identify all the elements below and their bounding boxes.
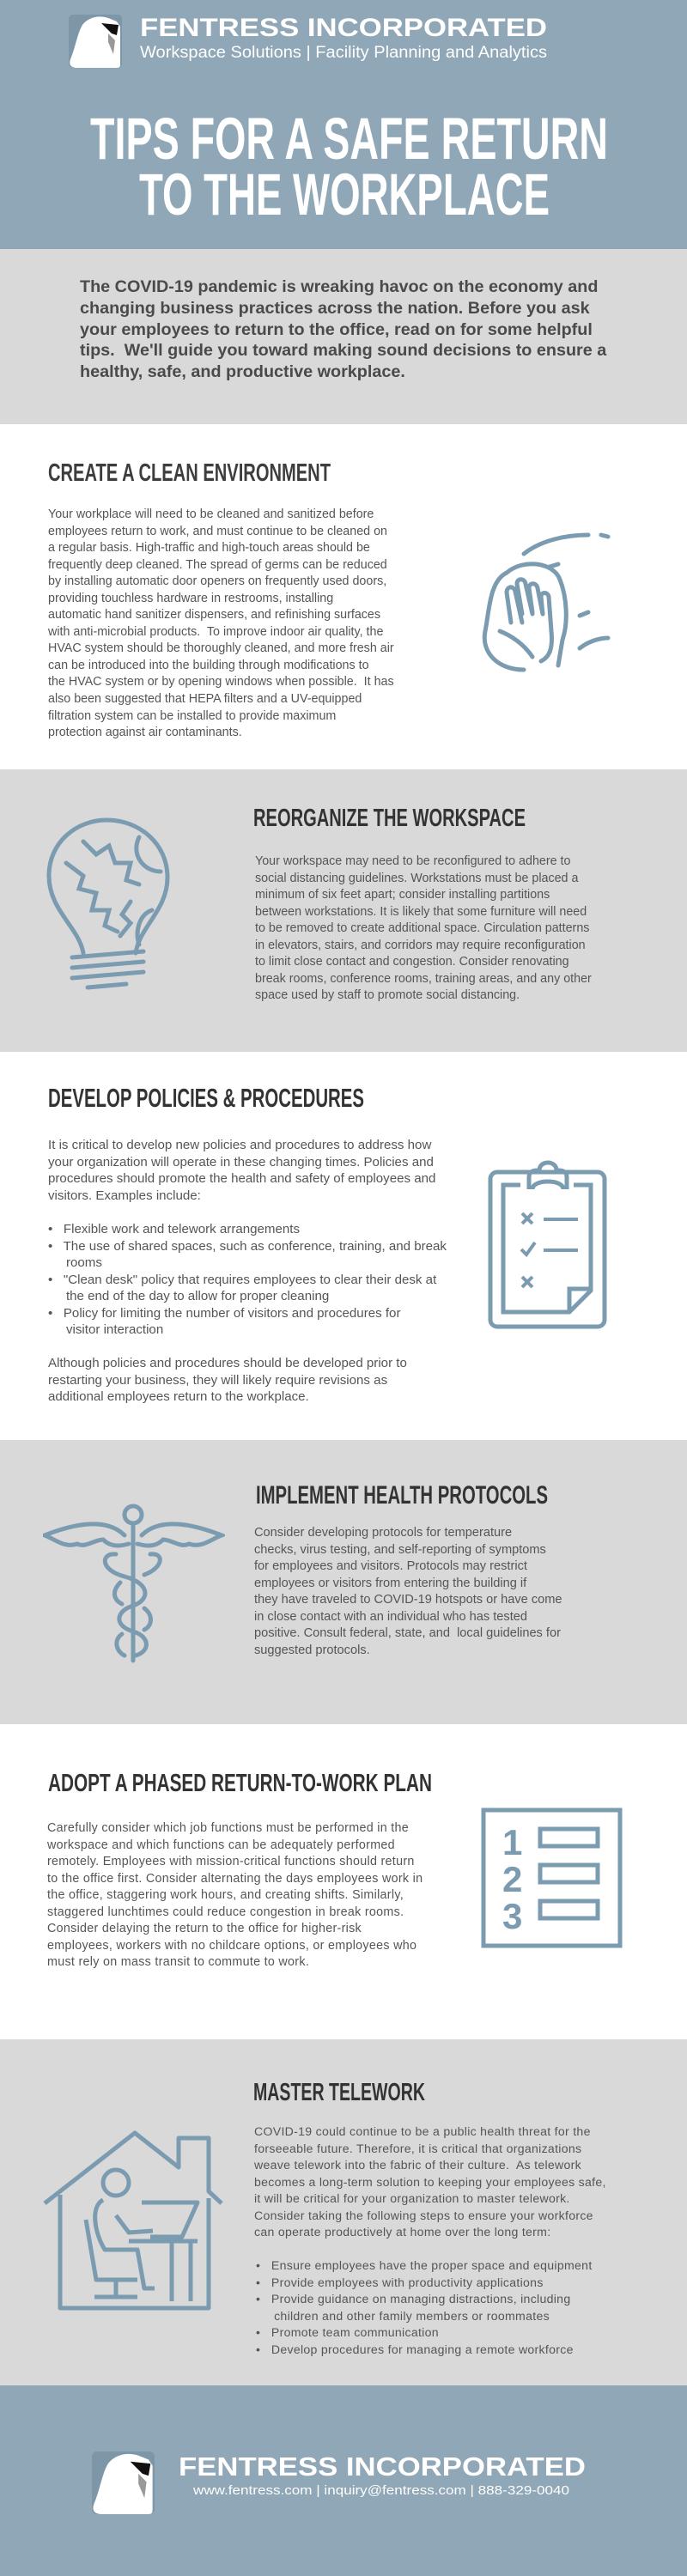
icon: house with teleworker	[43, 2130, 223, 2310]
footer band	[0, 2385, 687, 2576]
text: health protocols: Consider developing protocols for temperature checks, virus testing, and self-reporting of symptoms for employees and visitors. Protocols may restrict employees or visitors from entering the building if they have traveled to COVID-19 hotspots or have come in close contact with an individual who has tested positive. Consult federal, state, and local guidelines for suggested protocols.	[254, 1526, 562, 1657]
header band	[0, 0, 687, 249]
icon: numbered list	[481, 1808, 622, 1947]
footer logo	[92, 2451, 155, 2514]
intro text: The COVID-19 pandemic is wreaking havoc on the economy and changing business practices across the nation. Before you ask your employees to return to the office, read on for some helpful tips. We'll guide you toward making sound decisions to ensure a healthy, safe, and productive workplace.	[80, 277, 606, 381]
footer company name and contact	[179, 2451, 586, 2498]
header logo	[69, 15, 122, 68]
title	[90, 106, 608, 223]
intro band	[0, 249, 687, 424]
icon: numbered list: 3	[502, 1896, 522, 1936]
header company name	[140, 14, 547, 62]
section 4 band	[0, 1440, 687, 1724]
text: policies: It is critical to develop new policies and procedures to address how your organization will operate in these changing times. Policies and procedures should promote the health and safety of employees and visitors. Examples include:	[48, 1138, 435, 1203]
text: policies closing: Although policies and procedures should be developed prior to restarting your business, they will likely require revisions as additional employees return to the workplace.	[48, 1356, 407, 1404]
header company name: Workspace Solutions | Facility Planning and Analytics	[140, 44, 547, 62]
section 2 band	[0, 769, 687, 1052]
header company name: FENTRESS INCORPORATED	[140, 14, 547, 42]
icon: clipboard	[488, 1161, 606, 1329]
text: phased return: Carefully consider which job functions must be performed in the workspace and which functions can be adequately performed remotely. Employees with mission-critical functions should return to the office first. Consider alternating the days employees work in the office, staggering work hours, and creating shifts. Similarly, staggered lunchtimes could reduce congestion in break rooms. Consider delaying the return to the office for higher-risk employees, workers with no childcare options, or employees who must rely on mass transit to commute to work.	[47, 1821, 423, 1969]
icon: lightbulb with gears	[46, 817, 170, 989]
icon: hand wiping	[483, 532, 610, 671]
icon: caduceus	[43, 1504, 225, 1662]
text: reorganize: Your workspace may need to be reconfigured to adhere to social distancing guidelines. Workstations must be placed a minimum of six feet apart; consider installing partitions between workstations. It is likely that some furniture will need to be removed to create additional space. Circulation patterns in elevators, stairs, and corridors may require reconfiguration to limit close contact and congestion. Consider renovating break rooms, conference rooms, training areas, and any other space used by staff to promote social distancing.	[255, 854, 592, 1002]
text: telework: COVID-19 could continue to be a public health threat for the forseeable future. Therefore, it is critical that organizations weave telework into the fabric of their culture. As telework becomes a long-term solution to keeping your employees safe, it will be critical for your organization to master telework. Consider taking the following steps to ensure your workforce can operate productively at home over the long term:	[254, 2124, 606, 2239]
footer company name and contact: FENTRESS INCORPORATED	[179, 2451, 586, 2482]
icon: numbered list: 1	[502, 1822, 522, 1862]
icon: numbered list: 2	[502, 1859, 522, 1899]
bullet list: policies: • Flexible work and telework arrangements • The use of shared spaces, such as conference, training, and break rooms • "Clean desk" policy that requires employees to clear their desk at the end of the day to allow for proper cleaning • Policy for limiting the number of visitors and procedures for visitor interaction	[48, 1222, 447, 1337]
text: clean environment: Your workplace will need to be cleaned and sanitized before employees return to work, and must continue to be cleaned on a regular basis. High-traffic and high-touch areas should be frequently deep cleaned. The spread of germs can be reduced by installing automatic door openers on frequently used doors, providing touchless hardware in restrooms, installing automatic hand sanitizer dispensers, and refinishing surfaces with anti-microbial products. To improve indoor air quality, the HVAC system should be thoroughly cleaned, and more fresh air can be introduced into the building through modifications to the HVAC system or by opening windows when possible. It has also been suggested that HEPA filters and a UV-equipped filtration system can be installed to provide maximum protection against air contaminants.	[48, 507, 394, 739]
section 6 band	[0, 2039, 687, 2385]
footer company name and contact: www.fentress.com | inquiry@fentress.com | 888-329-0040	[192, 2483, 569, 2498]
bullet list: telework: • Ensure employees have the proper space and equipment • Provide employees with productivity applications • Provide guidance on managing distractions, including children and other family members or roommates • Promote team communication • Develop procedures for managing a remote workforce	[256, 2258, 593, 2356]
